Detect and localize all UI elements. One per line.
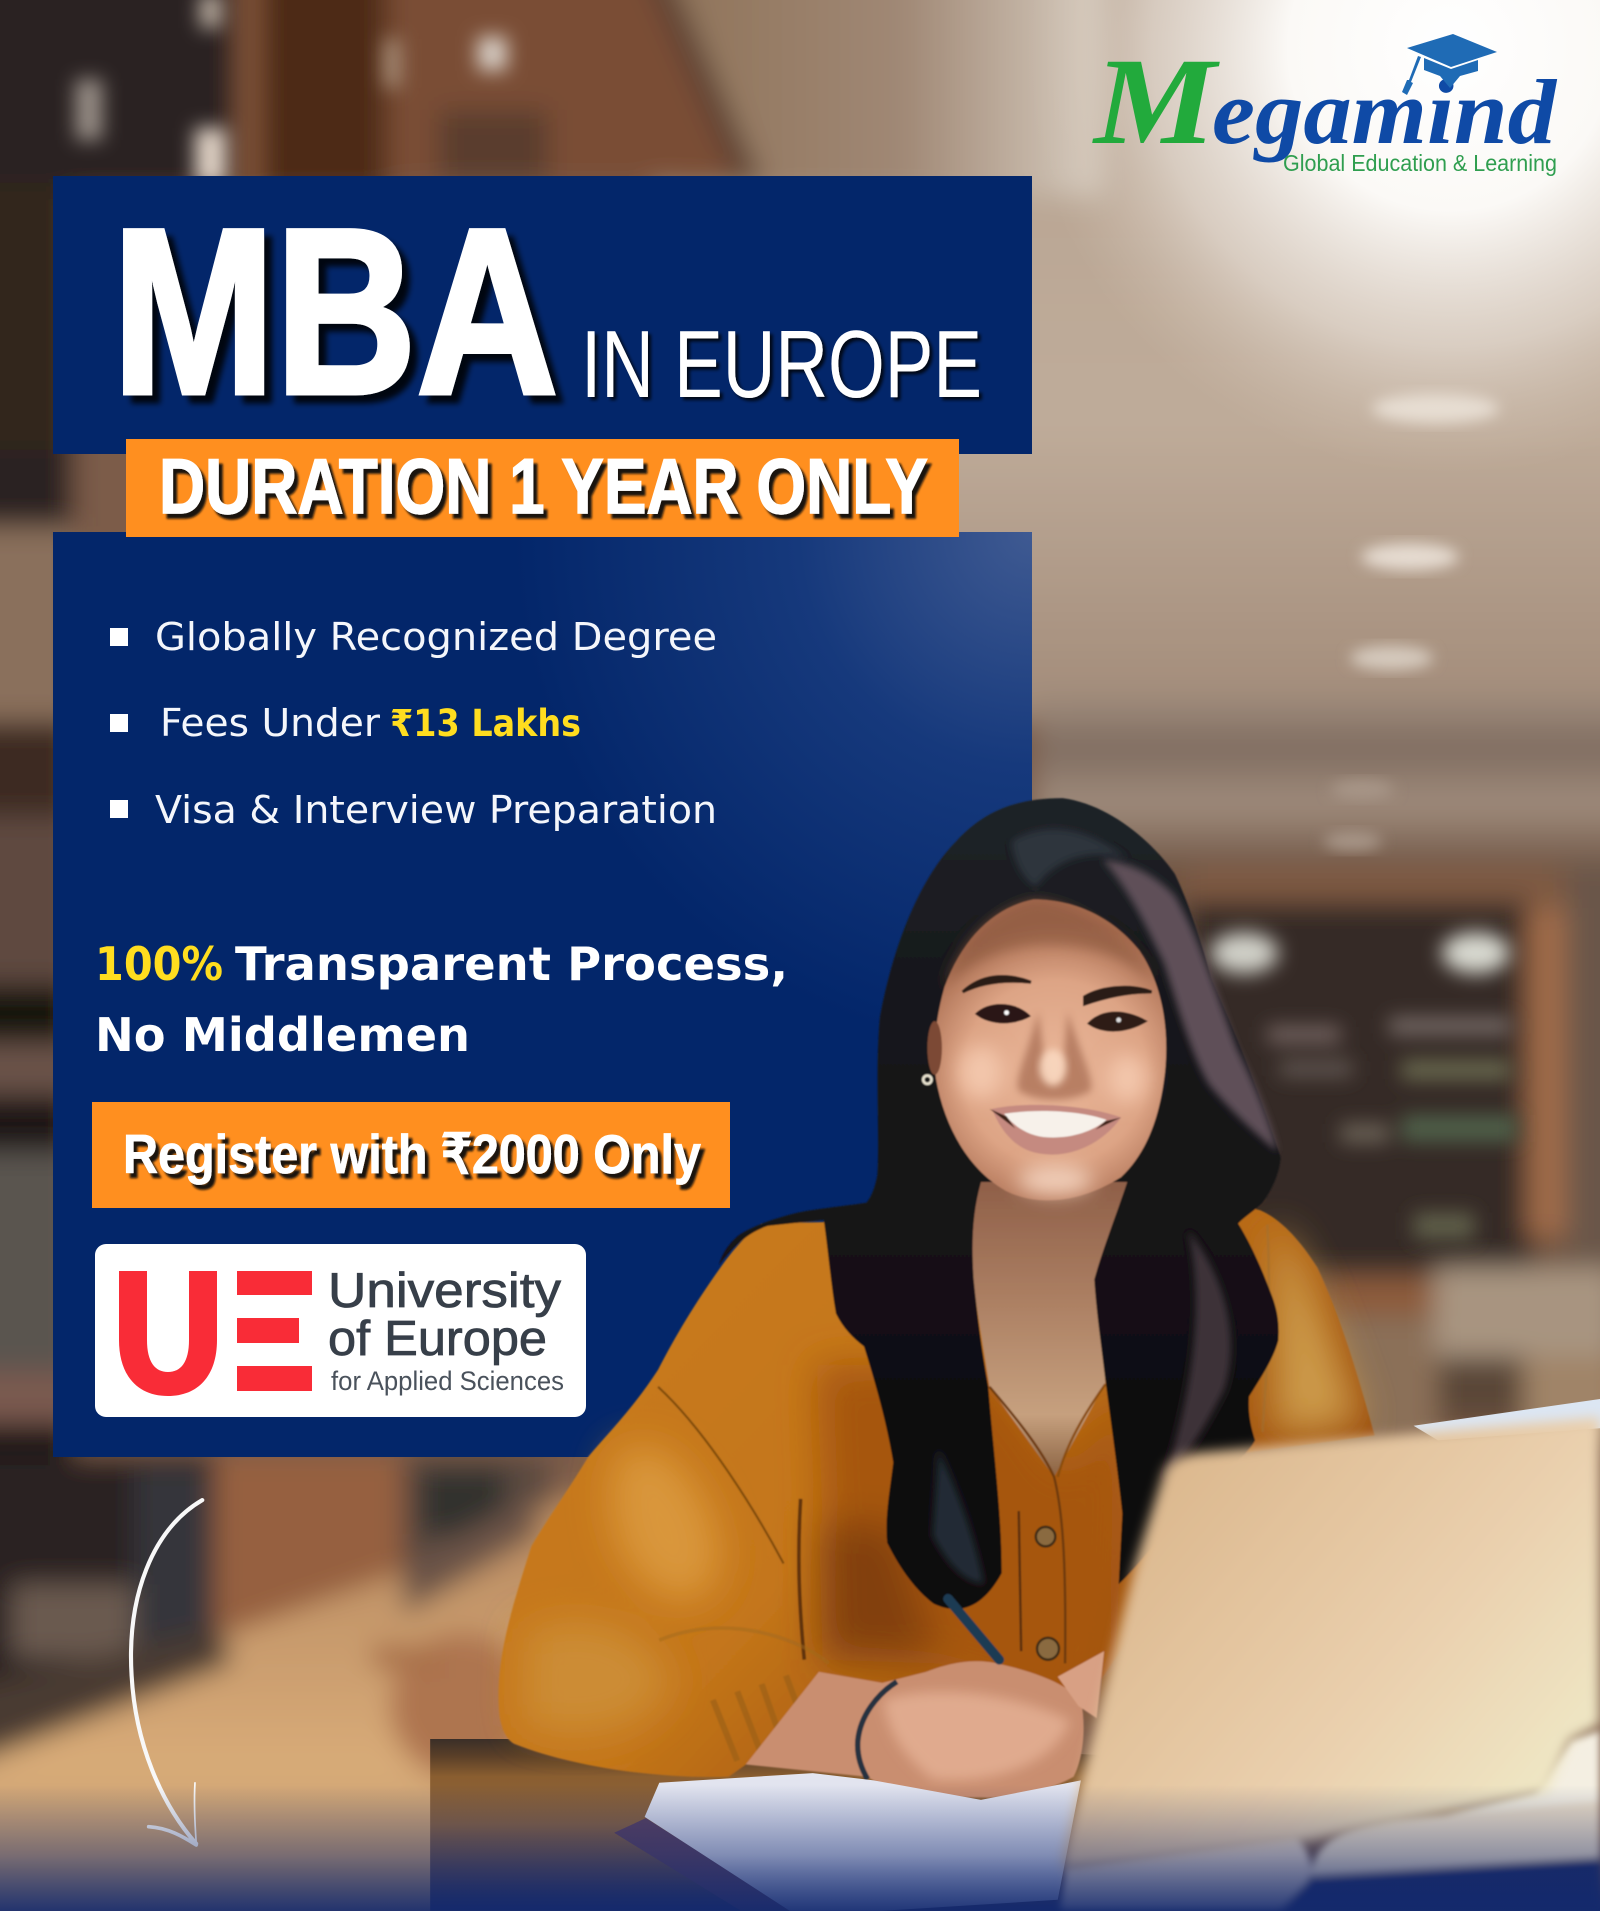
bullet 3: Visa & Interview Preparation (155, 788, 717, 832)
eyebrows (963, 976, 1152, 1004)
logo: University of Europe (95, 1244, 586, 1417)
teeth (1004, 1111, 1106, 1137)
bottom fade (0, 1785, 1600, 1911)
mouth (992, 1105, 1121, 1155)
photo: student at desk (430, 798, 1600, 1911)
paper behind laptop (1414, 1399, 1600, 1440)
hand highlight (883, 1692, 1070, 1780)
ear (927, 1021, 942, 1075)
bullet 2 (110, 701, 581, 745)
cheek highlights (959, 1046, 1147, 1194)
panel: title block (53, 176, 1032, 454)
bullet 1: Globally Recognized Degree (155, 615, 717, 659)
panel: details block (53, 532, 1032, 1457)
button text: Register with ₹2000 Only (123, 1123, 701, 1185)
pen (948, 1599, 999, 1660)
earring (923, 1076, 931, 1084)
arrow: hand drawn down arrow (131, 1500, 202, 1845)
face (934, 899, 1166, 1200)
table (430, 1739, 1600, 1911)
university name line 2: of Europe (328, 1312, 547, 1366)
text block: transparent process: Transparent Process, (235, 937, 788, 991)
icon: UE mark (119, 1271, 312, 1396)
eyes (975, 1004, 1148, 1032)
sweater shading (522, 1225, 1362, 1734)
fingers (1058, 1651, 1104, 1718)
logo wordmark initial: M (1092, 33, 1220, 170)
banner: duration (126, 439, 959, 537)
sweater (498, 1200, 1375, 1777)
text block: transparent process (95, 937, 788, 1062)
hair highlight strand (1103, 859, 1277, 1152)
forearm and hand (746, 1661, 1084, 1798)
hair (719, 798, 1281, 1609)
heading: MBA: MBA (112, 180, 558, 444)
button: register (92, 1102, 730, 1208)
text block: transparent process: 100% (95, 937, 223, 991)
logo: Megamind Global Education & Learning (1092, 33, 1558, 176)
buttons (1036, 1527, 1059, 1660)
bracelet (858, 1682, 897, 1779)
left hair strand sheen (932, 1450, 985, 1584)
nose highlight (1039, 1049, 1066, 1086)
smile corners (990, 1109, 1121, 1130)
heading: IN EUROPE: IN EUROPE (581, 311, 982, 418)
placket and collar lines (990, 1384, 1105, 1663)
banner text: DURATION 1 YEAR ONLY (159, 442, 928, 530)
hair lower strands (1164, 1231, 1231, 1481)
bullet list (110, 615, 717, 832)
neck and chest (969, 1164, 1133, 1477)
laptop lid (1063, 1417, 1600, 1871)
logo wordmark continuation: egamind (1212, 61, 1558, 163)
university tagline: for Applied Sciences (331, 1366, 564, 1396)
bullet 2: Fees Under (160, 701, 380, 745)
nose shadow (1018, 1011, 1091, 1100)
icon: graduation cap (1402, 34, 1497, 95)
sweater folds (658, 1225, 1269, 1761)
forehead shadow (944, 899, 1152, 987)
open book (1060, 1730, 1600, 1911)
bullet 2: ₹13 Lakhs (390, 702, 581, 745)
hair sheen on crown (1011, 829, 1127, 887)
student figure (498, 798, 1375, 1798)
logo tagline: Global Education & Learning (1283, 150, 1557, 176)
university name: University (328, 1264, 562, 1318)
notebook (614, 1773, 1081, 1911)
text block: transparent process: No Middlemen (95, 1008, 470, 1062)
